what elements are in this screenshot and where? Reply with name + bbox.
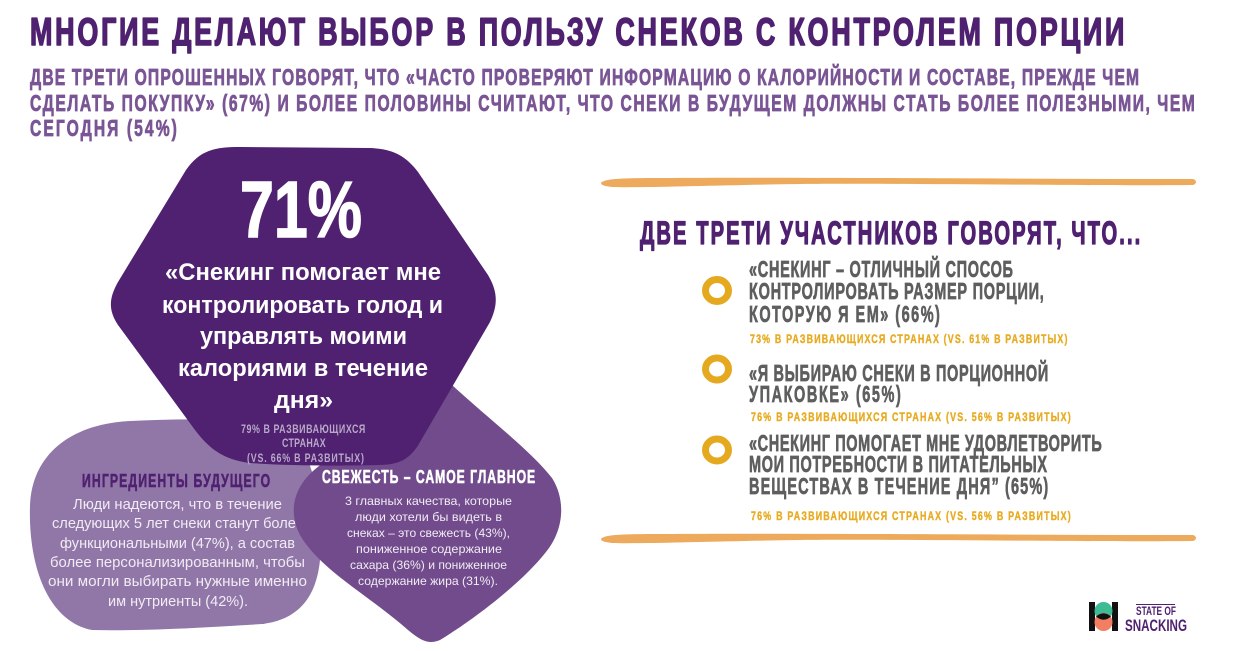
heading: freshness: СВЕЖЕСТЬ – САМОЕ ГЛАВНОЕ xyxy=(322,468,535,488)
quote: калориями в течение xyxy=(178,355,428,382)
note 3: 76% В РАЗВИВАЮЩИХСЯ СТРАНАХ (VS. 56% В РАЗВИТЫХ) xyxy=(751,510,1071,523)
body text: freshness: пониженное содержание xyxy=(356,542,502,556)
body text: future ingredients: функциональными (47%), а состав xyxy=(60,535,295,552)
hexagon shape xyxy=(111,147,496,466)
body text: freshness: снеках – это свежесть (43%), xyxy=(347,526,510,540)
panel: future ingredients xyxy=(30,419,321,630)
logo text xyxy=(1125,604,1187,635)
item 3 xyxy=(706,432,1102,523)
note 2: 76% В РАЗВИВАЮЩИХСЯ СТРАНАХ (VS. 56% В РАЗВИТЫХ) xyxy=(751,411,1071,424)
body text: future ingredients: им нутриенты (42%). xyxy=(108,593,248,610)
title: МНОГИЕ ДЕЛАЮТ ВЫБОР В ПОЛЬЗУ СНЕКОВ С КОНТРОЛЕМ ПОРЦИИ xyxy=(30,11,1124,54)
quote xyxy=(162,259,443,414)
body text: future ingredients: они могли выбирать нужные именно xyxy=(48,573,307,590)
note: developing vs developed xyxy=(241,423,365,465)
panel: freshness xyxy=(294,385,561,642)
body text: future ingredients: более персонализированным, чтобы xyxy=(50,554,305,571)
statement 1: КОНТРОЛИРОВАТЬ РАЗМЕР ПОРЦИИ, xyxy=(749,280,1044,305)
big number 71%: 71% xyxy=(240,165,362,254)
body text: freshness: люди хотели бы видеть в xyxy=(355,510,502,524)
subtitle xyxy=(30,63,1195,142)
statement 1 xyxy=(749,257,1044,328)
body text: freshness: сахара (36%) и пониженное xyxy=(350,558,507,572)
statement 3: «СНЕКИНГ ПОМОГАЕТ МНЕ УДОВЛЕТВОРИТЬ xyxy=(749,432,1102,457)
heading: two thirds: ДВЕ ТРЕТИ УЧАСТНИКОВ ГОВОРЯТ, ЧТО... xyxy=(640,215,1140,251)
statement 3 xyxy=(749,432,1102,500)
logo: State of Snacking xyxy=(1089,602,1187,635)
subtitle: ДВЕ ТРЕТИ ОПРОШЕННЫХ ГОВОРЯТ, ЧТО «ЧАСТО ПРОВЕРЯЮТ ИНФОРМАЦИЮ О КАЛОРИЙНОСТИ И СОСТАВЕ, ПРЕЖДЕ ЧЕМ xyxy=(30,63,1139,91)
blob: medium purple xyxy=(294,385,561,642)
subtitle: СЕГОДНЯ (54%) xyxy=(30,116,177,142)
icon: ring 2 xyxy=(706,358,728,380)
note: developing vs developed: (VS. 66% В РАЗВИТЫХ) xyxy=(247,452,364,465)
logo text: STATE OF xyxy=(1136,606,1176,618)
panel: 71% hexagon xyxy=(111,147,496,466)
divider: bottom brush stroke xyxy=(601,534,1196,543)
heading: future ingredients: ИНГРЕДИЕНТЫ БУДУЩЕГО xyxy=(82,472,270,492)
divider: top brush stroke xyxy=(601,178,1196,187)
icon: ring 3 xyxy=(706,439,728,461)
quote: «Снекинг помогает мне xyxy=(165,259,441,286)
statement 1: «СНЕКИНГ – ОТЛИЧНЫЙ СПОСОБ xyxy=(749,257,1013,283)
statement 3: МОИ ПОТРЕБНОСТИ В ПИТАТЕЛЬНЫХ xyxy=(749,453,1047,478)
statement 3: ВЕЩЕСТВАХ В ТЕЧЕНИЕ ДНЯ” (65%) xyxy=(749,475,1048,500)
body text: freshness: содержание жира (31%). xyxy=(358,574,498,588)
note 1: 73% В РАЗВИВАЮЩИХСЯ СТРАНАХ (VS. 61% В РАЗВИТЫХ) xyxy=(750,333,1067,346)
blob: light purple xyxy=(30,419,321,630)
body text: future ingredients: Люди надеются, что в течение xyxy=(73,496,282,513)
statement 2: УПАКОВКЕ» (65%) xyxy=(749,383,901,408)
statement 2 xyxy=(749,361,1048,408)
quote: дня» xyxy=(274,387,333,414)
item 2 xyxy=(706,358,1071,424)
body text: freshness: 3 главных качества, которые xyxy=(345,494,512,508)
body text: future ingredients: следующих 5 лет снеки станут более xyxy=(52,515,304,532)
icon: ring 1 xyxy=(706,280,728,302)
note: developing vs developed: 79% В РАЗВИВАЮЩИХСЯ xyxy=(241,423,365,436)
quote: контролировать голод и xyxy=(162,292,443,319)
body text: future ingredients xyxy=(48,496,307,610)
note: developing vs developed: СТРАНАХ xyxy=(282,437,326,450)
statement 1: КОТОРУЮ Я ЕМ» (66%) xyxy=(749,303,940,328)
statement 2: «Я ВЫБИРАЮ СНЕКИ В ПОРЦИОННОЙ xyxy=(749,361,1048,387)
logo text: SNACKING xyxy=(1125,616,1187,635)
body text: freshness xyxy=(345,494,512,588)
subtitle: СДЕЛАТЬ ПОКУПКУ» (67%) И БОЛЕЕ ПОЛОВИНЫ СЧИТАЮТ, ЧТО СНЕКИ В БУДУЩЕМ ДОЛЖНЫ СТАТЬ БОЛЕЕ ПОЛЕЗНЫМИ, ЧЕМ xyxy=(30,91,1195,117)
quote: управлять моими xyxy=(200,323,407,350)
logo mark xyxy=(1089,602,1118,631)
item 1 xyxy=(706,257,1067,346)
